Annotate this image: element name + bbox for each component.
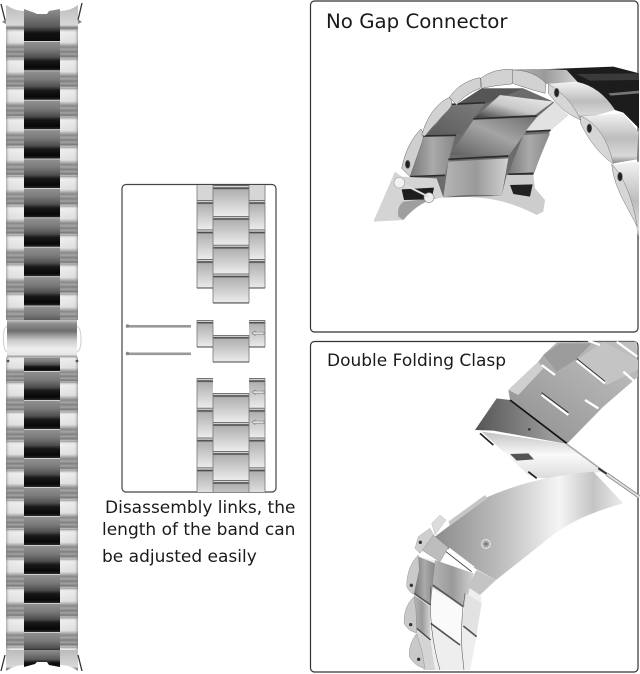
inner links, left column [410,136,455,177]
lower link rows [6,357,78,651]
outer clasp plate [435,472,623,580]
connector lugs and spring bars [373,172,443,222]
panel: no gap connector [310,1,639,332]
panel frame [310,1,638,332]
double folding clasp [3,320,81,356]
inner links, right column [526,102,568,131]
caption: disassembly links [102,498,295,567]
silver outer links [513,69,577,84]
inner links, centre column [475,95,553,117]
open clasp and upper band [475,341,639,497]
caption: disassembly links: be adjusted easily [102,547,257,567]
clasp rivet [482,540,490,548]
panel frame [310,342,638,672]
release rod [567,444,639,497]
removed link, middle [197,320,265,362]
arch backing [410,88,568,197]
link slots [542,341,637,415]
arrow: pin direction, bottom lower [252,420,264,424]
rounded side pieces [407,555,419,594]
heading: Double Folding Clasp [327,351,506,371]
removal pin, lower [126,352,191,355]
clasp hinge [475,398,567,444]
caption: disassembly links: length of the band can [102,520,295,540]
folded clasp plate and lower band [404,472,623,670]
upper link rows [6,30,78,320]
rivets [405,88,622,181]
lower band links [413,557,482,670]
black centre links [540,67,639,128]
band top connector [1,3,82,41]
rounded side pieces [402,129,423,177]
panel frame [122,184,276,492]
left image: full watch band [1,3,82,671]
band close-up with connector [373,67,639,240]
arrow: pin direction, bottom upper [252,390,264,394]
upper band links [508,342,638,443]
panel: double folding clasp [310,341,639,672]
band bottom connector [1,650,82,671]
arrow: pin direction, middle [252,331,264,336]
heading: No Gap Connector [326,10,508,33]
assembled links, bottom [197,378,265,492]
caption: disassembly links: Disassembly links, the [105,498,295,518]
assembled links, top [197,185,265,303]
panel: disassembly links diagram [122,184,276,492]
removal pin, upper [126,324,191,328]
inner clasp plate [482,432,603,478]
